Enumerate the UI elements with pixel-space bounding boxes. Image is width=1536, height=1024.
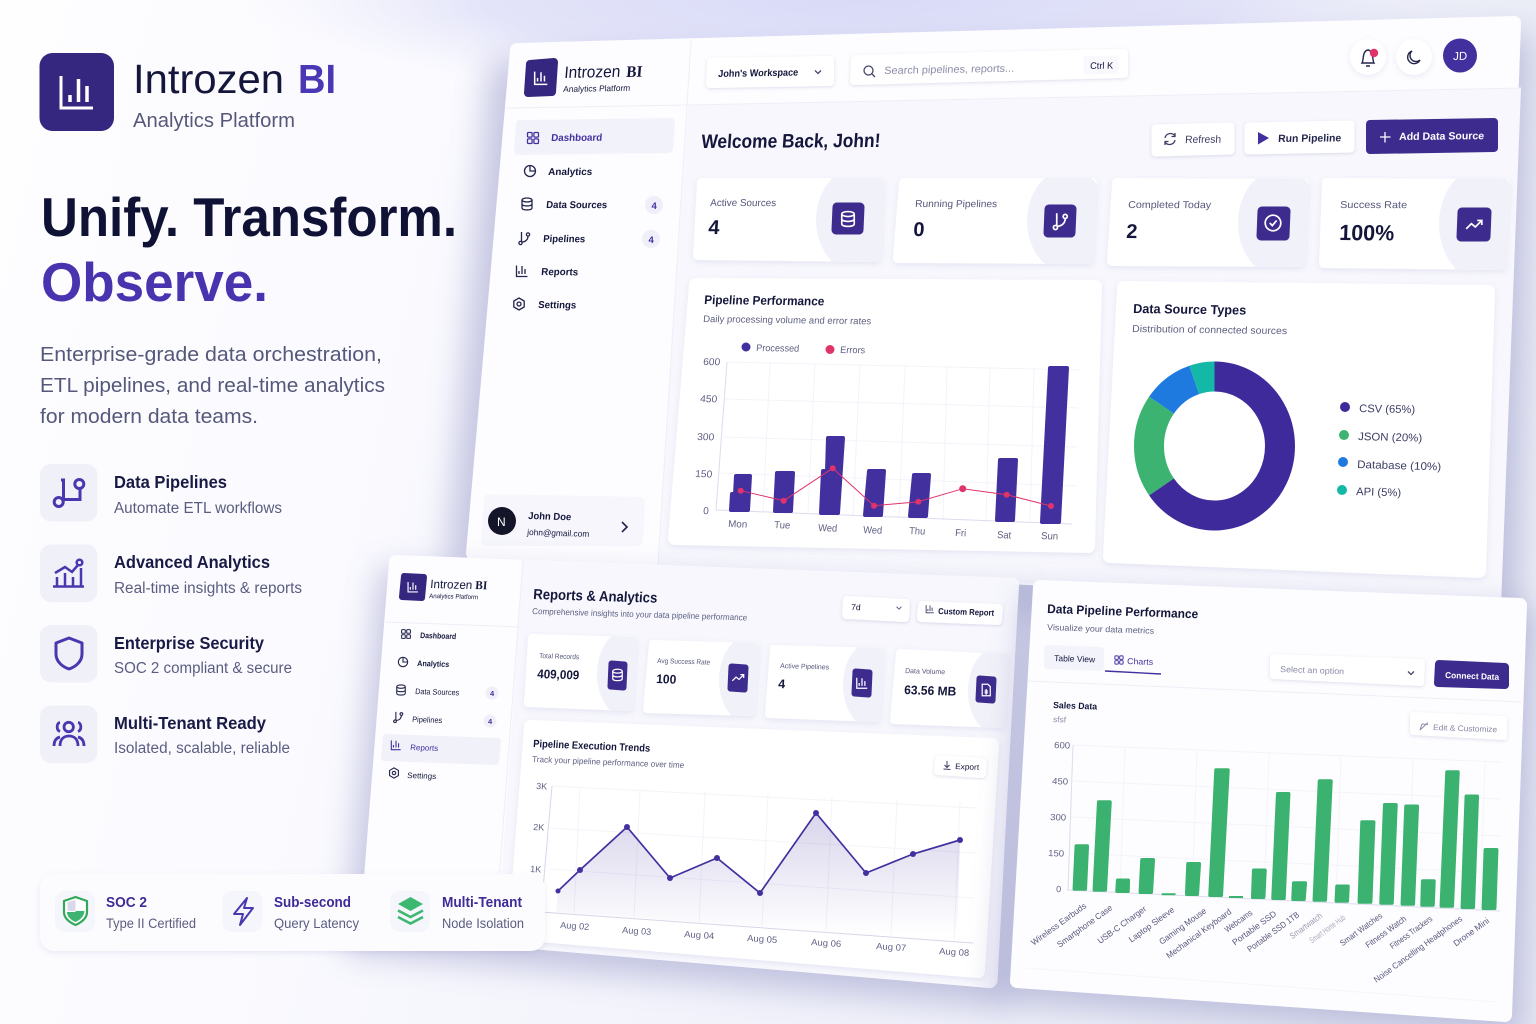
- donut legend: JSON (20%): [1358, 431, 1422, 445]
- feature: Data Pipelines: [40, 464, 282, 522]
- sidebar navigation: Reports: [541, 267, 579, 278]
- chart: sales bars: Noise Cancelling Headphones: [1372, 914, 1464, 985]
- trust badges bar: [40, 874, 545, 951]
- button: Run Pipeline: [1248, 124, 1350, 150]
- line chart: Aug 02: [560, 920, 590, 932]
- intro paragraph: for modern data teams.: [40, 405, 258, 428]
- chart: bars and error line: Tue: [774, 520, 791, 532]
- chart: sales bars: 0: [1056, 884, 1061, 894]
- panel: Data Source Types: [1110, 288, 1488, 571]
- headline: [41, 186, 457, 313]
- chart: sales bars: Fitness Watch: [1363, 913, 1408, 950]
- stat card: Completed Today: [1106, 186, 1310, 270]
- feature: Data Pipelines: Data Pipelines: [114, 472, 227, 492]
- period select: [846, 600, 906, 618]
- panel: Data Pipeline Performance: [996, 587, 1536, 1024]
- period select: 7d: [851, 602, 861, 612]
- icon: team: [40, 706, 98, 763]
- button: Add Data Source: Add Data Source: [1399, 130, 1485, 143]
- sidebar navigation: Data Sources: [546, 200, 608, 211]
- heading: Data Pipeline Performance: Data Pipeline Performance: [1047, 602, 1199, 621]
- button: Refresh: [1156, 126, 1230, 152]
- chart: bars and error line: 150: [695, 469, 713, 481]
- stat card: Success Rate: 100%: [1339, 220, 1395, 245]
- search box: [854, 53, 1124, 81]
- sidebar navigation: 4: [490, 689, 495, 698]
- icon: green shield: [55, 891, 95, 932]
- chart: bars and error line: 600: [703, 357, 721, 368]
- stat card: Total Records: Total Records: [539, 653, 580, 661]
- stat card: Success Rate: [1318, 186, 1510, 272]
- tabs: Table View: [1054, 653, 1096, 664]
- badge: Multi-Tenant: Node Isolation: [442, 915, 524, 931]
- sidebar navigation: Settings: [538, 300, 577, 311]
- chart: sales bars: Portable SSD: [1230, 909, 1278, 947]
- sidebar navigation: 4: [648, 235, 654, 246]
- feature: Data Pipelines: Automate ETL workflows: [114, 500, 282, 517]
- chart: bars and error line: Sun: [1041, 531, 1058, 543]
- chart legend: [742, 342, 866, 356]
- line chart: Aug 08: [939, 946, 969, 958]
- user card: John Doe: John Doe: [528, 511, 572, 523]
- sidebar navigation: [514, 122, 671, 311]
- chart: sales bars: Webcams: [1222, 908, 1254, 934]
- brand name accent: BI: [298, 56, 336, 102]
- chart: bars and error line: Sat: [997, 530, 1012, 542]
- sidebar brand: Analytics Platform: [429, 593, 478, 601]
- donut chart: [1149, 376, 1280, 515]
- button: Add Data Source: [1370, 122, 1494, 150]
- chart: sales bars: [1029, 740, 1500, 985]
- user card: John Doe: john@gmail.com: [526, 527, 590, 539]
- brand logo: [40, 53, 114, 131]
- chart: sales bars: Portable SSD 1TB: [1245, 909, 1301, 954]
- stat card: Active Pipelines: 4: [778, 677, 786, 691]
- chart: sales bars: Smartphone Case: [1055, 902, 1114, 949]
- stat card: Active Pipelines: [764, 653, 884, 724]
- headline: Observe.: [41, 251, 268, 313]
- headline: Unify. Transform.: [41, 186, 457, 248]
- user avatar: JD: [1453, 51, 1467, 63]
- feature: Advanced Analytics: Advanced Analytics: [114, 552, 270, 572]
- feature: Multi-Tenant Ready: Multi-Tenant Ready: [114, 713, 266, 733]
- intro paragraph: Enterprise-grade data orchestration,: [40, 343, 382, 366]
- sidebar brand: Introzen: [564, 62, 621, 82]
- chart: sales bars: 450: [1052, 776, 1068, 787]
- select: option: [1273, 657, 1422, 683]
- sidebar navigation: Pipelines: [412, 715, 443, 725]
- stat card: Avg Success Rate: 100: [656, 672, 677, 687]
- icon: shield: [40, 625, 98, 682]
- icon: layers: [390, 891, 430, 932]
- panel: Pipeline Execution Trends: [515, 727, 992, 971]
- stat card: Total Records: [524, 642, 638, 714]
- stat card: Avg Success Rate: Avg Success Rate: [657, 658, 710, 667]
- sidebar navigation: Pipelines: [543, 234, 586, 245]
- stat card: Active Sources: 4: [708, 217, 721, 239]
- panel subtitle: Visualize your data metrics: [1047, 622, 1154, 636]
- sidebar navigation: Dashboard: [420, 631, 457, 641]
- feature: Multi-Tenant Ready: Isolated, scalable, reliable: [114, 740, 290, 757]
- sidebar navigation: [384, 630, 498, 781]
- line chart: Aug 03: [622, 925, 652, 937]
- panel: Reports and Analytics: [345, 560, 1028, 1006]
- stat card: Avg Success Rate: [642, 648, 760, 718]
- stat card: Completed Today: Completed Today: [1128, 200, 1211, 211]
- heading: Sales Data: [1053, 700, 1098, 724]
- chart legend: Processed: [756, 343, 800, 355]
- user card: John Doe: [486, 499, 640, 541]
- button: Custom Report: [921, 605, 999, 621]
- stat card: Data Volume: [890, 656, 1010, 730]
- chart: bars and error line: 450: [700, 394, 718, 405]
- icon: notifications bell: [1350, 39, 1386, 75]
- stat card: Running Pipelines: [892, 185, 1098, 266]
- chart: bars and error line: Fri: [955, 528, 966, 539]
- workspace select: John's Workspace: [718, 68, 799, 80]
- sidebar navigation: Analytics: [548, 167, 593, 178]
- user card: John Doe: N: [497, 515, 506, 529]
- trends subtitle: Track your pipeline performance over time: [532, 754, 685, 770]
- button: Refresh: Refresh: [1185, 134, 1222, 146]
- stat card: Data Volume: 63.56 MB: [904, 683, 957, 699]
- badge: SOC 2: SOC 2: [106, 895, 147, 911]
- badge: SOC 2: Type II Certified: [106, 915, 196, 931]
- icon: analytics chart: [40, 544, 98, 602]
- badge: SOC 2: [55, 891, 196, 932]
- badge: Multi-Tenant: Multi-Tenant: [442, 895, 522, 911]
- button: Export: Export: [955, 762, 980, 772]
- intro paragraph: [40, 343, 385, 428]
- badge: Sub-second: Sub-second: [274, 895, 351, 911]
- tabs: Charts: [1127, 656, 1153, 667]
- sidebar brand: BI: [626, 64, 643, 81]
- line chart: 2K: [533, 822, 545, 832]
- heading: Sales Data: Sales Data: [1053, 700, 1098, 712]
- brand name: Introzen: [133, 56, 284, 102]
- stat card: Active Sources: [692, 185, 884, 264]
- chart: bars and error line: 300: [697, 432, 715, 443]
- chart: sales bars: USB-C Charger: [1095, 903, 1148, 946]
- badge: Sub-second: [222, 891, 359, 932]
- workspace select: [710, 60, 830, 84]
- chart: sales bars: Smart Watches: [1338, 911, 1384, 948]
- line chart: 3K: [536, 781, 548, 791]
- stat card: Active Sources: Active Sources: [710, 198, 777, 209]
- button: Edit and Customize: [1413, 715, 1504, 737]
- heading: Pipeline Performance: Pipeline Performance: [704, 293, 825, 308]
- line chart: 1K: [530, 864, 542, 875]
- chart: bars and error line: Wed: [818, 523, 838, 535]
- chart: sales bars: 600: [1054, 740, 1070, 751]
- sidebar navigation: 4: [488, 717, 493, 726]
- icon: dark mode moon: [1396, 39, 1432, 75]
- line chart: Aug 06: [811, 937, 841, 949]
- feature: Enterprise Security: [40, 625, 292, 682]
- heading: Reports and Analytics: Reports & Analytics: [533, 587, 658, 607]
- chart: bars and error line: Wed: [863, 525, 883, 537]
- badge: Multi-Tenant: [390, 891, 524, 932]
- sidebar navigation: Dashboard: [551, 133, 603, 144]
- chart: sales bars: Fitness Trackers: [1388, 914, 1434, 951]
- stat card: Active Pipelines: Active Pipelines: [780, 663, 830, 671]
- icon: pipeline: [40, 464, 98, 522]
- tabs: [1047, 648, 1161, 674]
- chart: sales bars: Smart Home Hub: [1307, 912, 1347, 945]
- search box: Ctrl K: [1090, 61, 1114, 72]
- feature: Enterprise Security: SOC 2 compliant & secure: [114, 660, 292, 677]
- chart: bars and error line: [695, 357, 1080, 543]
- chart: sales bars: Laptop Sleeve: [1127, 904, 1176, 944]
- stat card: Success Rate: Success Rate: [1340, 200, 1408, 211]
- chart: bars and error line: 0: [703, 506, 710, 517]
- chart: sales bars: Gaming Mouse: [1157, 905, 1208, 947]
- button: Custom Report: Custom Report: [938, 606, 995, 618]
- stat card: Running Pipelines: Running Pipelines: [915, 199, 997, 210]
- sidebar navigation: Settings: [407, 771, 437, 781]
- line chart: Aug 04: [684, 929, 715, 941]
- search box: Search pipelines, reports...: [884, 63, 1015, 77]
- sidebar brand: BI: [475, 578, 488, 592]
- sidebar navigation: Analytics: [417, 659, 450, 669]
- badge: Sub-second: Query Latency: [274, 915, 359, 931]
- brand tagline: Analytics Platform: [133, 110, 295, 132]
- donut legend: API (5%): [1356, 486, 1401, 499]
- reports subtitle: Comprehensive insights into your data pipeline performance: [532, 606, 748, 622]
- stat card: Total Records: 409,009: [537, 667, 580, 682]
- sidebar navigation: 4: [652, 201, 658, 212]
- feature: Enterprise Security: Enterprise Security: [114, 633, 264, 653]
- chart: sales bars: Smartwatch: [1288, 910, 1324, 941]
- stat card: Data Volume: Data Volume: [905, 668, 945, 676]
- sidebar brand: [528, 62, 643, 94]
- sidebar brand: Analytics Platform: [563, 83, 631, 94]
- chart: sales bars: Wireless Earbuds: [1029, 901, 1088, 947]
- line chart: [530, 781, 977, 958]
- heading: Welcome Back: Welcome Back, John!: [701, 130, 881, 153]
- button: Connect Data: [1438, 664, 1505, 685]
- feature: Advanced Analytics: [40, 544, 302, 602]
- button: Run Pipeline: Run Pipeline: [1278, 132, 1342, 145]
- sidebar navigation: Reports: [410, 743, 439, 753]
- button: Connect Data: Connect Data: [1445, 670, 1500, 682]
- select: option: Select an option: [1280, 664, 1345, 676]
- icon: lightning: [222, 891, 262, 932]
- heading: Pipeline Execution Trends: Pipeline Execution Trends: [533, 738, 651, 755]
- panel: main dashboard: [446, 23, 1530, 640]
- donut legend: Database (10%): [1357, 459, 1441, 473]
- stat card: Running Pipelines: 0: [913, 219, 925, 241]
- chart: sales bars: Mechanical Keyboard: [1164, 906, 1233, 960]
- user avatar: [1443, 38, 1477, 72]
- chart: bars and error line: Thu: [909, 526, 926, 538]
- chart: bars and error line: Mon: [728, 519, 748, 531]
- donut legend: CSV (65%): [1359, 403, 1415, 416]
- line chart: Aug 07: [876, 941, 906, 953]
- chart: sales bars: 300: [1050, 812, 1066, 823]
- chart: sales bars: 150: [1048, 848, 1064, 859]
- chart subtitle: Distribution of connected sources: [1132, 324, 1287, 337]
- sidebar navigation: Data Sources: [415, 687, 460, 697]
- intro paragraph: ETL pipelines, and real-time analytics: [40, 374, 385, 397]
- sidebar brand: [402, 576, 488, 601]
- chart subtitle: Daily processing volume and error rates: [703, 314, 872, 327]
- stat card: Completed Today: 2: [1126, 221, 1138, 243]
- line chart: Aug 05: [747, 933, 777, 945]
- feature: Multi-Tenant Ready: [40, 706, 290, 763]
- panel: Pipeline Performance chart: [675, 285, 1095, 546]
- feature: Advanced Analytics: Real-time insights & reports: [114, 580, 302, 597]
- heading: Sales Data: sfsf: [1053, 715, 1067, 724]
- chart legend: Errors: [840, 345, 866, 356]
- button: Export: [938, 759, 983, 774]
- donut legend: [1337, 402, 1441, 499]
- sidebar brand: Introzen: [430, 577, 473, 592]
- button: Edit and Customize: Edit & Customize: [1433, 723, 1498, 734]
- chart: sales bars: Drone Mini: [1451, 915, 1491, 948]
- heading: Data Source Types: Data Source Types: [1133, 301, 1247, 318]
